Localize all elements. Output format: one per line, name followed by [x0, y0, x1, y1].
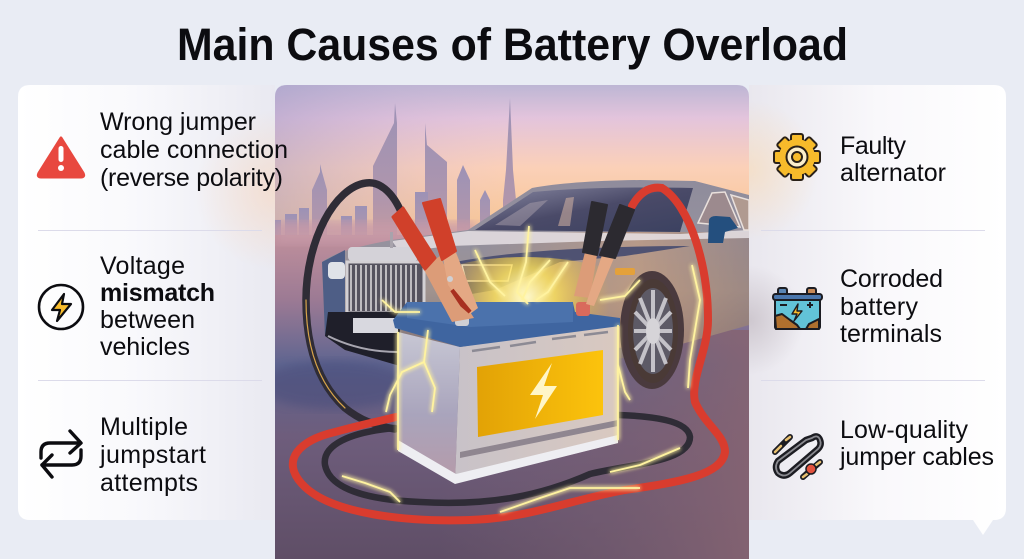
windshield	[475, 188, 693, 232]
spark glow	[460, 257, 604, 315]
text: multiple jumpstart attempts: jumpstart	[99, 441, 206, 469]
yellow label	[477, 350, 603, 437]
text: wrong jumper cable connection	[100, 108, 288, 192]
icon: gear	[774, 134, 820, 180]
red clamps	[393, 199, 478, 322]
car body	[322, 180, 749, 365]
text: wrong jumper cable connection: Wrong jumper	[100, 108, 256, 136]
label lightning bolt	[530, 363, 557, 419]
city skyline	[275, 98, 516, 240]
illustration: battery overload scene	[260, 85, 749, 559]
text: voltage mismatch between vehicles	[100, 252, 215, 361]
icon: lightning bolt in circle	[39, 285, 83, 329]
road	[260, 222, 749, 559]
icon: corroded battery	[773, 288, 822, 329]
battery left face	[398, 332, 460, 483]
grille	[347, 262, 424, 313]
hood highlight	[393, 230, 749, 248]
battery base	[398, 435, 618, 484]
battery	[393, 302, 620, 484]
text: low-quality jumper cables: jumper cables	[839, 443, 994, 471]
icon: warning triangle	[38, 138, 84, 177]
text: voltage mismatch between vehicles: Voltage	[100, 252, 185, 280]
text: corroded battery terminals	[840, 265, 943, 348]
black cable	[306, 183, 690, 503]
text: corroded battery terminals: terminals	[840, 320, 942, 348]
panel: left causes	[18, 85, 288, 520]
text: low-quality jumper cables	[839, 416, 994, 471]
text: faulty alternator: alternator	[840, 159, 946, 187]
hood band	[455, 246, 690, 296]
text: voltage mismatch between vehicles: between	[100, 306, 195, 334]
side windows	[698, 192, 740, 227]
icon: repeat arrows	[41, 431, 81, 477]
mirror	[708, 216, 738, 243]
text: wrong jumper cable connection: (reverse polarity)	[100, 164, 283, 192]
text: wrong jumper cable connection: cable connection	[100, 136, 288, 164]
black clamps	[574, 202, 634, 306]
text: multiple jumpstart attempts: Multiple	[100, 413, 188, 441]
red cable	[293, 188, 725, 520]
text: faulty alternator: Faulty	[840, 132, 906, 160]
bumper	[325, 312, 400, 366]
battery right face	[455, 323, 618, 483]
wheel	[628, 279, 678, 383]
text: multiple jumpstart attempts	[99, 413, 206, 497]
battery lid	[393, 302, 620, 347]
wheel arch	[620, 271, 684, 389]
text: corroded battery terminals: Corroded	[840, 265, 943, 293]
panel: right causes	[749, 85, 1006, 535]
sky	[275, 85, 749, 250]
text: low-quality jumper cables: Low-quality	[840, 416, 968, 444]
text: faulty alternator	[840, 132, 946, 187]
text: multiple jumpstart attempts: attempts	[100, 469, 198, 497]
terminals	[455, 318, 469, 326]
indicator	[615, 268, 635, 275]
title: Main Causes of Battery Overload	[177, 19, 848, 70]
text: voltage mismatch between vehicles: vehicles	[100, 333, 190, 361]
headlight and nose	[322, 250, 345, 350]
car	[322, 180, 749, 389]
lightning arcs	[342, 226, 700, 512]
text: voltage mismatch between vehicles: mismatch	[100, 279, 215, 307]
text: corroded battery terminals: battery	[840, 293, 918, 321]
icon: jumper cable	[775, 436, 821, 477]
